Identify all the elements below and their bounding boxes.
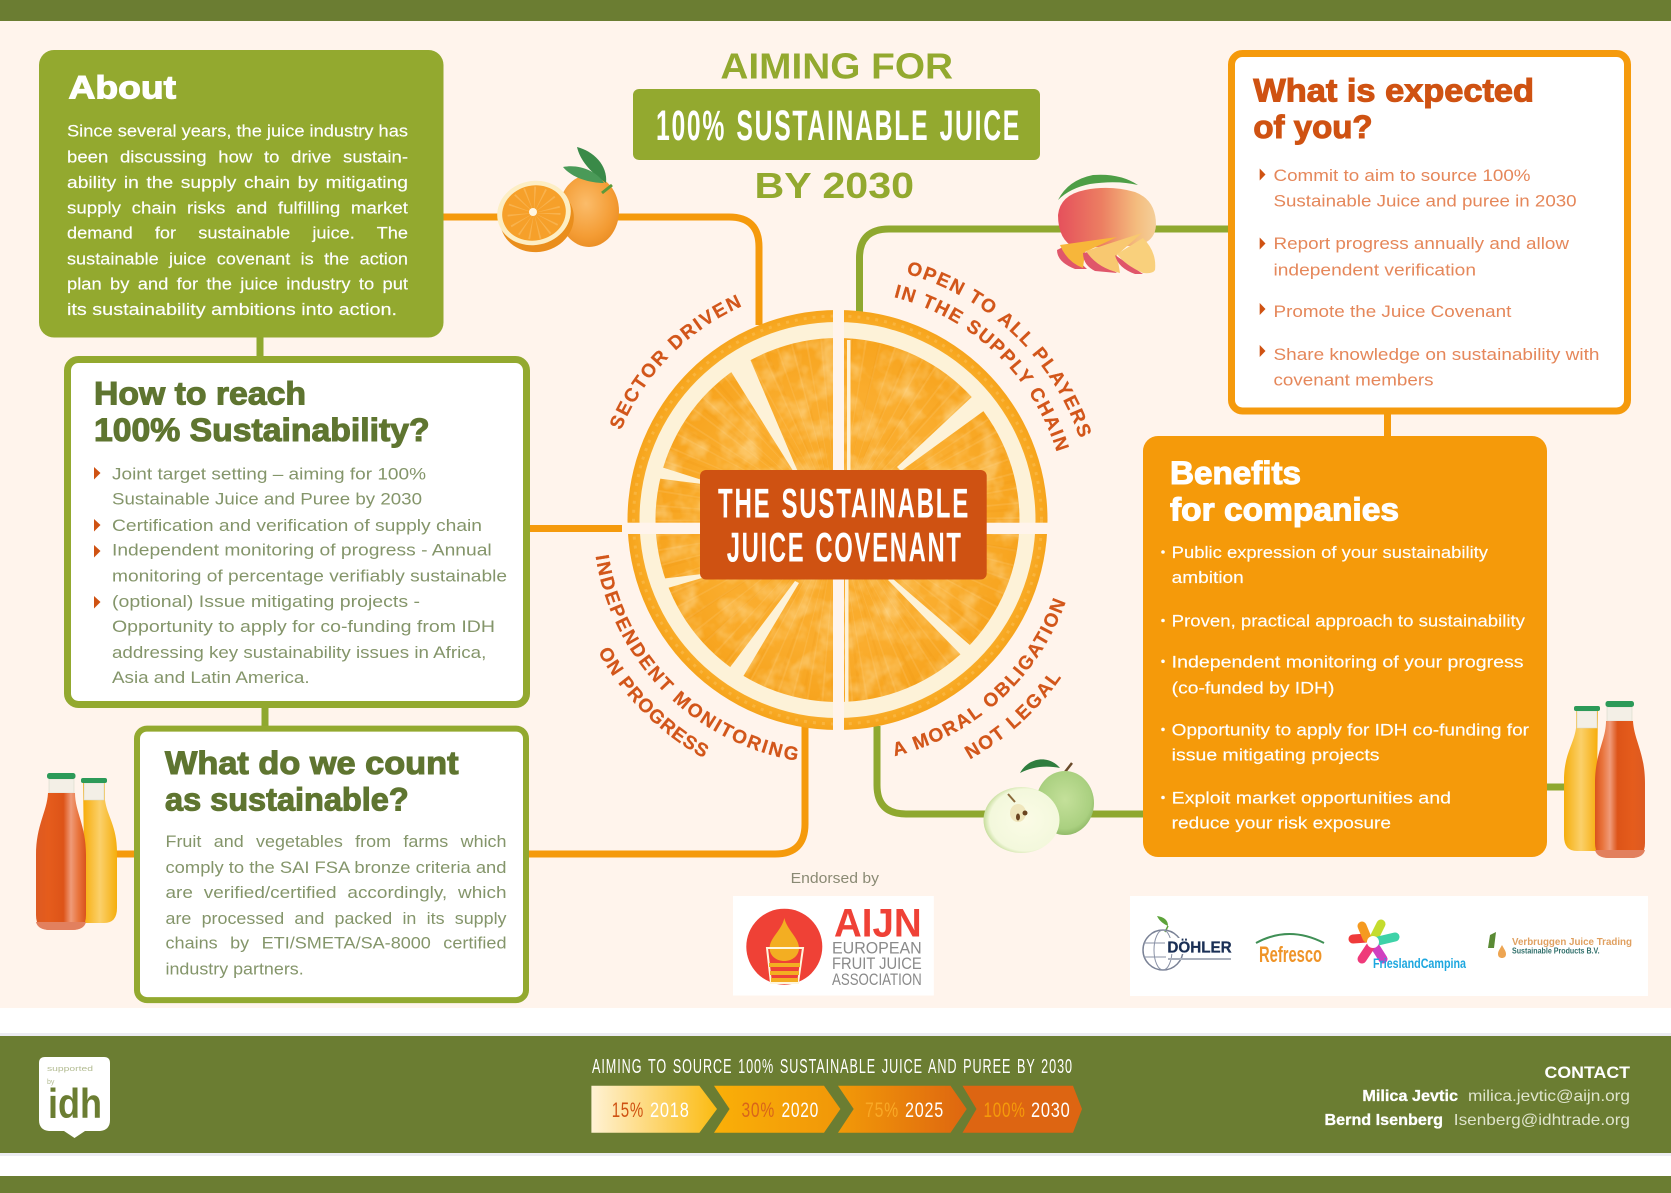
heading: how to reach: 100% Sustainability? bbox=[94, 412, 430, 448]
icon: juice bottles left bbox=[36, 773, 117, 930]
text: definition of sustainable: chains by ETI/SMETA/SA-8000 certified bbox=[166, 934, 507, 953]
list: expectations: covenant members bbox=[1274, 370, 1434, 389]
connector: how to what bbox=[262, 706, 268, 728]
panel: benefits for companies bbox=[1143, 436, 1547, 857]
list: expectations: Commit to aim to source 100% bbox=[1274, 166, 1530, 185]
heading: benefits: Benefits bbox=[1170, 455, 1301, 491]
heading: about: About bbox=[68, 70, 176, 106]
about text: supply chain risks and fulfilling market bbox=[67, 198, 408, 218]
about text: sustainable juice covenant is the action bbox=[67, 249, 408, 268]
connector: left bottles to box bbox=[112, 850, 136, 858]
connector: what do we count to orange slice bbox=[527, 726, 805, 854]
logo: Refresco: Refresco bbox=[1259, 942, 1322, 967]
footer contact: Milica Jevtic bbox=[1362, 1088, 1458, 1105]
title banner bbox=[633, 89, 1040, 160]
list: how to reach items: monitoring of percentage verifiably sustainable bbox=[112, 567, 507, 586]
logo: FrieslandCampina bbox=[1353, 924, 1466, 971]
logo: FrieslandCampina: FrieslandCampina bbox=[1373, 955, 1466, 971]
center label: the sustainable juice covenant: JUICE COVENANT bbox=[727, 524, 963, 571]
icon: mango bbox=[1057, 175, 1156, 274]
endorsed by label: Endorsed by bbox=[791, 871, 880, 887]
list: how to reach items: addressing key sustainability issues in Africa, bbox=[112, 643, 486, 662]
footer contact: Isenberg@idhtrade.org bbox=[1454, 1112, 1630, 1129]
logo: IDH shield bbox=[39, 1057, 110, 1138]
text: definition of sustainable: are verified/certified accordingly, which bbox=[166, 883, 506, 902]
center label: the sustainable juice covenant bbox=[700, 470, 987, 580]
logo: AIJN bbox=[733, 896, 934, 996]
list: benefits: ambition bbox=[1172, 568, 1244, 587]
text: definition of sustainable: Fruit and vegetables from farms which bbox=[166, 832, 506, 851]
logo: IDH shield: supported bbox=[47, 1066, 93, 1073]
chevron: 100% 2030: 2030 bbox=[1031, 1099, 1070, 1122]
about text: been discussing how to drive sustain- bbox=[67, 148, 408, 167]
logo: Verbruggen Juice Trading: Sustainable Products B.V. bbox=[1512, 946, 1600, 955]
title banner: 100% SUSTAINABLE JUICE bbox=[656, 102, 1021, 150]
list: how to reach items: Joint target setting – aiming for 100% bbox=[112, 464, 426, 484]
title line: aiming for: AIMING FOR bbox=[720, 46, 953, 86]
list: how to reach items: Opportunity to apply for co-funding from IDH bbox=[112, 617, 495, 636]
curved label: in the supply chain: IN THE SUPPLY CHAIN bbox=[894, 284, 1069, 452]
connector: how to reach to orange slice bbox=[528, 525, 626, 532]
heading: benefits: for companies bbox=[1170, 492, 1399, 528]
icon: green apple bbox=[984, 759, 1094, 853]
list: expectations: independent verification bbox=[1274, 260, 1476, 280]
chevron: 75% 2025 bbox=[838, 1086, 967, 1133]
chevron: 75% 2025: 75% bbox=[865, 1099, 899, 1122]
title line: by 2030: BY 2030 bbox=[754, 165, 914, 206]
text: definition of sustainable bbox=[166, 832, 507, 978]
curved label: open to all players: OPEN TO ALL PLAYERS bbox=[908, 262, 1091, 437]
logo: Refresco bbox=[1256, 934, 1324, 967]
title bbox=[633, 46, 1040, 206]
curved label: independent monitoring: INDEPENDENT MONITORING bbox=[596, 554, 798, 760]
about text: its sustainability ambitions into action. bbox=[67, 300, 397, 319]
logo: IDH shield: idh bbox=[48, 1080, 102, 1127]
logo: Dohler: DÖHLER bbox=[1167, 938, 1232, 957]
connector: benefits to right bottles bbox=[1545, 784, 1570, 790]
curved label: not legal: NOT LEGAL bbox=[964, 676, 1062, 760]
connector: expected to benefits bbox=[1384, 412, 1391, 438]
list: benefits: Proven, practical approach to sustainability bbox=[1172, 612, 1526, 630]
about text: ability in the supply chain by mitigating bbox=[67, 173, 408, 192]
footer contact: milica.jevtic@aijn.org bbox=[1468, 1088, 1630, 1105]
list: benefits: reduce your risk exposure bbox=[1172, 813, 1391, 832]
panel: how to reach bbox=[68, 360, 526, 704]
footer contact: Bernd Isenberg bbox=[1324, 1112, 1443, 1129]
list: how to reach items: (optional) Issue mitigating projects - bbox=[112, 592, 420, 611]
logo: Dohler bbox=[1143, 916, 1233, 970]
text: definition of sustainable: comply to the SAI FSA bronze criteria and bbox=[166, 858, 507, 877]
heading: what do we count: What do we count bbox=[165, 745, 459, 781]
list: benefits: Public expression of your sustainability bbox=[1172, 543, 1489, 562]
orange slice bbox=[622, 304, 1053, 736]
chevron: 100% 2030 bbox=[962, 1086, 1082, 1133]
list: benefits: issue mitigating projects bbox=[1172, 745, 1380, 764]
list: expectations: Sustainable Juice and puree in 2030 bbox=[1274, 192, 1577, 211]
center label: the sustainable juice covenant: THE SUSTAINABLE bbox=[718, 480, 970, 527]
curved label: a moral obligation: A MORAL OBLIGATION bbox=[894, 598, 1066, 756]
list: how to reach items: Sustainable Juice and Puree by 2030 bbox=[112, 489, 422, 508]
bottom bar bbox=[0, 1176, 1671, 1193]
chevron: 75% 2025: 2025 bbox=[905, 1099, 944, 1122]
chevron: 30% 2020: 2020 bbox=[782, 1099, 819, 1122]
logo: AIJN: EUROPEAN bbox=[832, 939, 922, 957]
about text: Since several years, the juice industry has bbox=[67, 122, 408, 141]
footer contact bbox=[1324, 1063, 1631, 1129]
heading: how to reach: How to reach bbox=[94, 376, 306, 412]
curved label: on progress: ON PROGRESS bbox=[600, 648, 708, 756]
icon: juice bottles right bbox=[1564, 701, 1645, 858]
list: benefits: Opportunity to apply for IDH co-funding for bbox=[1172, 720, 1529, 739]
list: how to reach items: Asia and Latin America. bbox=[112, 668, 310, 687]
list: expectations: Share knowledge on sustainability with bbox=[1274, 345, 1599, 364]
about text: demand for sustainable juice. The bbox=[67, 224, 408, 243]
panel: company logos bbox=[1130, 896, 1648, 996]
heading: benefits bbox=[1170, 455, 1399, 528]
top bar bbox=[0, 0, 1671, 21]
chevron: 15% 2018: 15% bbox=[612, 1099, 644, 1122]
roadmap heading: AIMING TO SOURCE 100% SUSTAINABLE JUICE AND PUREE BY 2030 bbox=[592, 1056, 1073, 1078]
list: benefits: (co-funded by IDH) bbox=[1172, 678, 1334, 697]
heading: what is expected bbox=[1253, 72, 1534, 145]
chevron: 30% 2020: 30% bbox=[742, 1099, 775, 1122]
list: benefits bbox=[1161, 543, 1529, 832]
panel: about bbox=[39, 50, 444, 338]
list: how to reach items: Certification and verification of supply chain bbox=[112, 516, 482, 535]
list: how to reach items: Independent monitoring of progress - Annual bbox=[112, 541, 492, 560]
about text bbox=[67, 122, 408, 319]
panel: what do we count as sustainable bbox=[137, 729, 526, 1000]
text: definition of sustainable: are processed and packed in its supply bbox=[166, 909, 507, 928]
logo: AIJN: FRUIT JUICE bbox=[832, 955, 922, 973]
chevron: 15% 2018 bbox=[591, 1086, 717, 1133]
list: benefits: Exploit market opportunities and bbox=[1172, 788, 1451, 808]
curved label: sector driven: SECTOR DRIVEN bbox=[610, 294, 742, 429]
list: expectations: Report progress annually and allow bbox=[1274, 234, 1570, 253]
panel: what is expected of you bbox=[1232, 54, 1628, 411]
logo: IDH shield: by bbox=[47, 1079, 55, 1086]
heading: what is expected: of you? bbox=[1253, 109, 1373, 145]
chevron: 100% 2030: 100% bbox=[984, 1099, 1026, 1122]
logo: Verbruggen Juice Trading: Verbruggen Juice Trading bbox=[1512, 936, 1632, 948]
chevron: 15% 2018: 2018 bbox=[650, 1099, 690, 1122]
logo: AIJN: ASSOCIATION bbox=[832, 971, 922, 989]
list: benefits: Independent monitoring of your progress bbox=[1172, 652, 1524, 671]
list: expectations bbox=[1260, 166, 1599, 389]
about text: plan by and for the juice industry to put bbox=[67, 275, 408, 294]
text: definition of sustainable: industry partners. bbox=[166, 959, 304, 978]
heading: what do we count: as sustainable? bbox=[165, 782, 409, 818]
connector: about to how bbox=[256, 336, 264, 358]
chevron: 30% 2020 bbox=[714, 1086, 840, 1133]
footer roadmap bbox=[591, 1056, 1082, 1133]
list: expectations: Promote the Juice Covenant bbox=[1274, 302, 1512, 321]
logo: AIJN: AIJN bbox=[834, 902, 922, 946]
heading: what is expected: What is expected bbox=[1253, 72, 1534, 108]
connector: apple to orange slice bbox=[877, 726, 1145, 814]
list: how to reach items bbox=[94, 464, 507, 687]
heading: how to reach bbox=[94, 376, 430, 448]
connector: mango to orange slice bbox=[860, 229, 1228, 314]
connector: about to orange slice bbox=[443, 217, 759, 325]
footer band bbox=[0, 1033, 1671, 1156]
heading: what do we count bbox=[165, 745, 459, 818]
icon: orange fruit bbox=[491, 147, 619, 259]
logo: Verbruggen Juice Trading bbox=[1488, 932, 1632, 958]
footer contact: CONTACT bbox=[1544, 1063, 1631, 1082]
